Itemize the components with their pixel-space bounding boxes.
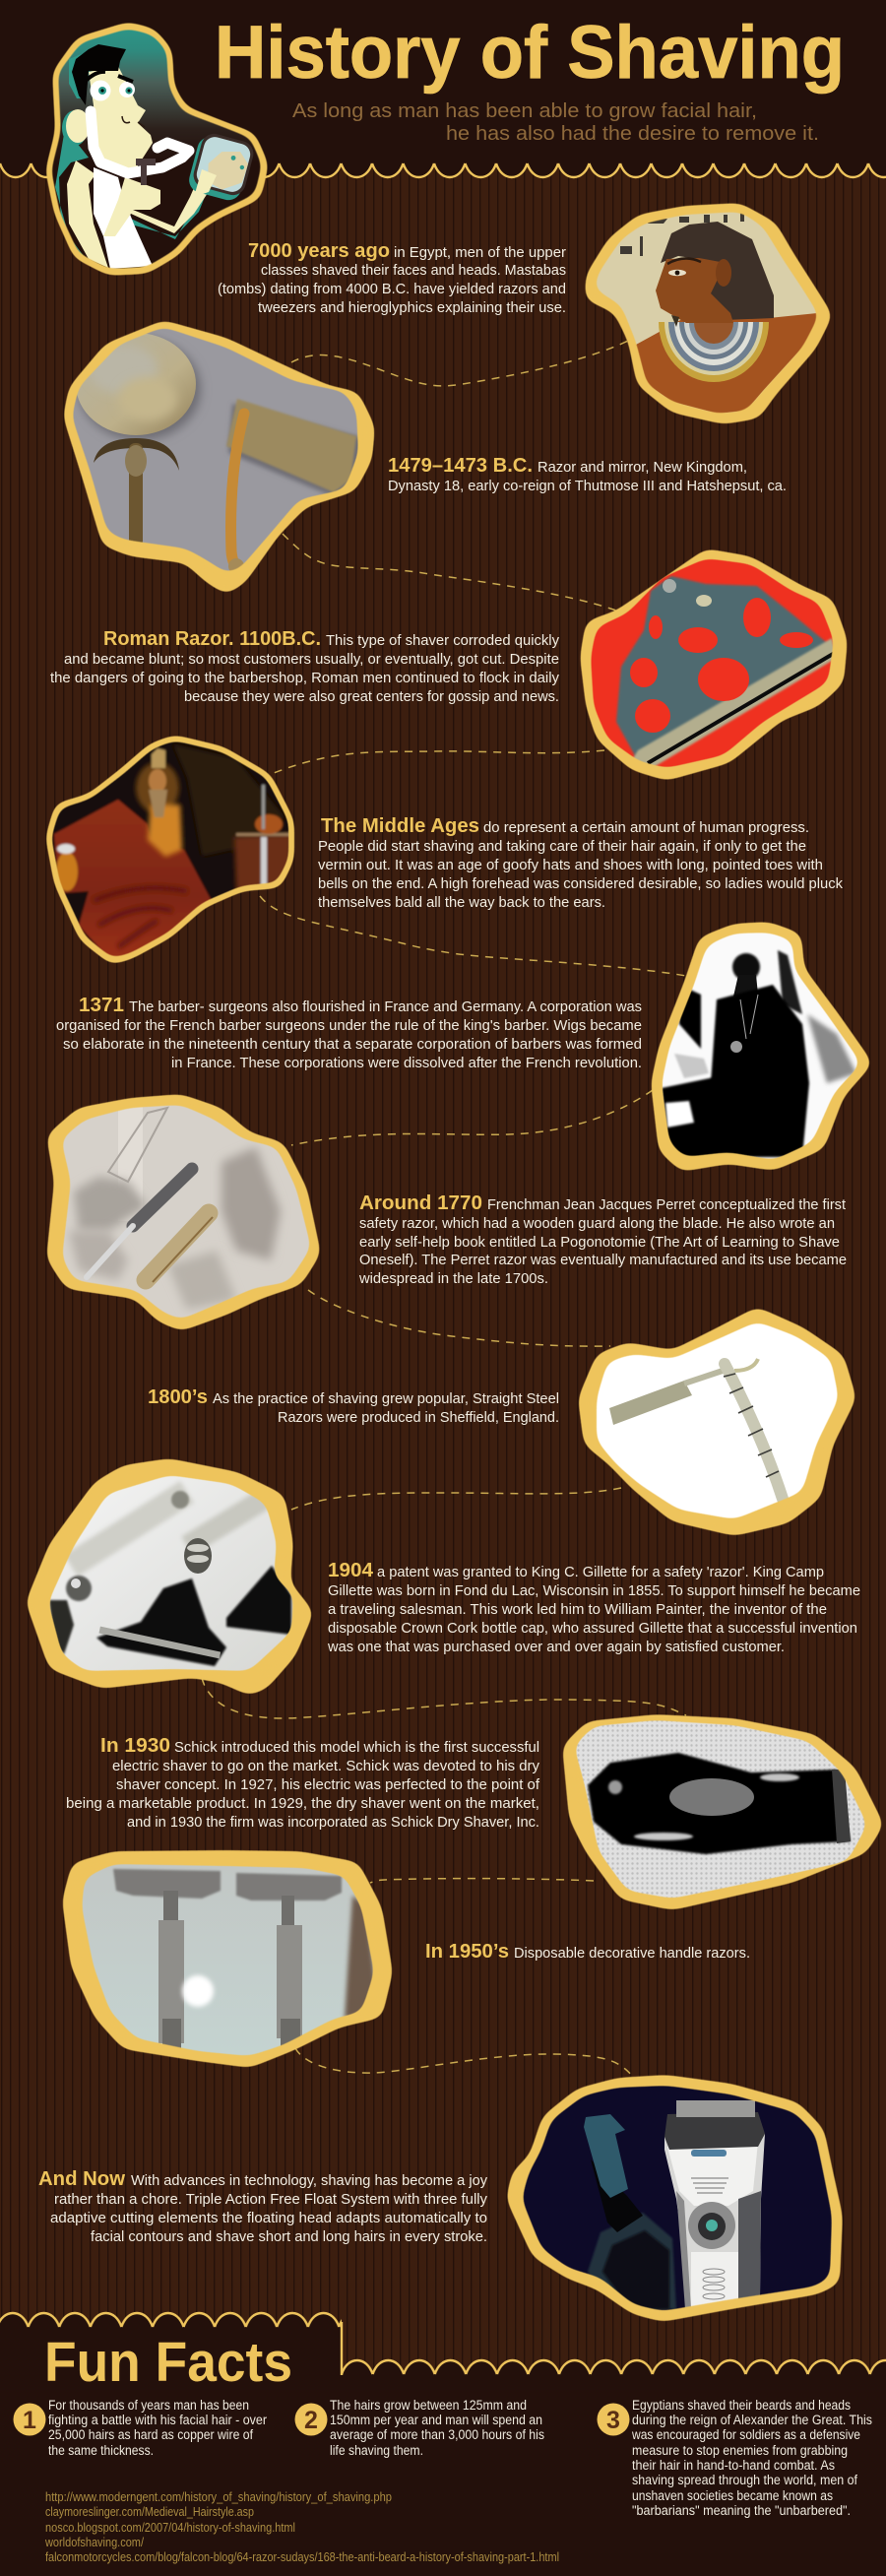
text block: 1904: Gillette was born in Fond du Lac, Wisconsin in 1855. To support himself he became: [328, 1583, 860, 1599]
fun fact 3: [597, 2398, 872, 2518]
source links: claymoreslinger.com/Medieval_Hairstyle.asp: [45, 2505, 254, 2519]
fact 3 text: "barbarians" meaning the "unbarbered".: [632, 2503, 851, 2518]
text block: In 1930: being a marketable product. In 1929, the dry shaver went on the market,: [66, 1796, 539, 1812]
text block: In 1930: [66, 1735, 540, 1831]
panel: Middle Ages king painting: [45, 736, 295, 963]
text block: And Now: rather than a chore. Triple Action Free Float System with three fully: [54, 2192, 488, 2208]
fact 3 text: their hair in hand-to-hand combat. As: [632, 2458, 835, 2473]
dashed connector lines: [202, 340, 686, 2080]
text block: In 1950's: Disposable decorative handle razors.: [514, 1946, 750, 1962]
text block: 1800's: Razors were produced in Sheffield, England.: [278, 1410, 559, 1426]
panel: modern electric shaver: [502, 2073, 847, 2324]
text block: 7000 years ago: tweezers and hieroglyphics explaining their use.: [258, 300, 566, 316]
text block: 1479-1473 B.C.: 1479–1473 B.C.: [388, 455, 533, 477]
source links: [44, 2490, 559, 2564]
header band: [0, 0, 886, 160]
source links: http://www.moderngent.com/history_of_shaving/history_of_shaving.php: [45, 2490, 392, 2504]
panel: Gillette safety razors: [26, 1458, 314, 1696]
subtitle: As long as man has been able to grow facial hair,: [292, 100, 757, 122]
title: History of Shaving: [215, 11, 845, 95]
fact 2 text: average of more than 3,000 hours of his: [330, 2427, 544, 2442]
text block: Around 1770: widespread in the late 1700s.: [358, 1271, 548, 1287]
text block: 7000 years ago: 7000 years ago: [248, 240, 390, 262]
fact 2 text: life shaving them.: [330, 2443, 423, 2458]
text block: 1479-1473 B.C.: [388, 455, 787, 494]
fact 3 text: [631, 2398, 872, 2518]
footer panel background: [0, 2310, 886, 2576]
text block: 1904: 1904: [328, 1560, 374, 1581]
fact 1 text: the same thickness.: [48, 2443, 154, 2458]
text block: Roman Razor: Roman Razor. 1100B.C.: [103, 628, 321, 650]
text block: And Now: And Now: [38, 2168, 125, 2190]
text block: The Middle Ages: bells on the end. A high forehead was considered desirable, so ladies would pluck: [318, 876, 844, 892]
text block: 1479-1473 B.C.: Razor and mirror, New Kingdom,: [538, 460, 747, 476]
text block: In 1950's: In 1950’s: [425, 1941, 509, 1963]
text block: In 1930: and in 1930 the firm was incorporated as Schick Dry Shaver, Inc.: [127, 1815, 539, 1831]
text block: The Middle Ages: People did start shaving and taking care of their hair again, if only to get the: [318, 839, 806, 855]
text block: Roman Razor: because they were also great centers for gossip and news.: [184, 689, 559, 705]
text block: The Middle Ages: do represent a certain amount of human progress.: [483, 820, 809, 836]
text block: 1371: in France. These corporations were dissolved after the French revolution.: [171, 1056, 642, 1071]
fact 1 text: For thousands of years man has been: [48, 2398, 249, 2413]
fun fact 2: [295, 2398, 544, 2458]
text block: 1904: a traveling salesman. This work led him to William Painter, the inventor of the: [328, 1602, 827, 1618]
icon: number 3 badge: 3: [606, 2407, 620, 2434]
fact 3 text: unshaven societies became known as: [632, 2488, 833, 2503]
text block: In 1950's: [425, 1941, 750, 1963]
text block: 1371: [56, 995, 642, 1071]
text block: 7000 years ago: [218, 240, 566, 316]
fact 3 text: during the reign of Alexander the Great. This: [632, 2413, 872, 2427]
panel: bronze mirror and razor: [59, 315, 375, 596]
text block: 1371: so elaborate in the nineteenth century that a separate corporation of barbers was formed: [63, 1037, 642, 1053]
text block: 7000 years ago: in Egypt, men of the upper: [394, 245, 566, 261]
source links: worldofshaving.com/: [44, 2536, 144, 2549]
fact 1 text: fighting a battle with his facial hair - over: [48, 2413, 267, 2427]
panel: razor and sketch: [44, 1093, 325, 1334]
text block: The Middle Ages: vermin out. It was an age of goofy hats and shoes with long, pointed toes with: [318, 858, 823, 873]
text block: 1371: organised for the French barber surgeons under the rule of the king's barber. Wigs became: [56, 1018, 642, 1034]
header scalloped edge: [0, 158, 886, 181]
text block: Roman Razor: [50, 628, 560, 705]
text block: Around 1770: Oneself). The Perret razor was eventually manufactured and its use became: [359, 1253, 847, 1268]
panel: Roman razor: [580, 547, 852, 783]
text block: And Now: With advances in technology, shaving has become a joy: [131, 2173, 488, 2189]
fact 3 text: was encouraged for soldiers as a defensive: [631, 2427, 860, 2442]
text block: Roman Razor: and became blunt; so most customers usually, or eventually, got cut. Despite: [64, 652, 559, 668]
source links: nosco.blogspot.com/2007/04/history-of-shaving.html: [45, 2521, 295, 2535]
text block: Around 1770: Around 1770: [359, 1192, 482, 1214]
fact 2 text: The hairs grow between 125mm and: [330, 2398, 527, 2413]
subtitle: he has also had the desire to remove it.: [446, 123, 819, 145]
icon: number 1 badge: 1: [23, 2407, 36, 2434]
icon: number 2 badge: [295, 2403, 327, 2436]
text block: In 1930: electric shaver to go on the market. Schick was devoted to his dry: [112, 1759, 540, 1774]
fact 3 text: measure to stop enemies from grabbing: [632, 2443, 848, 2458]
panel: two disposable handle razors: [59, 1850, 394, 2068]
fact 1 text: 25,000 hairs as hard as copper wire of: [48, 2427, 253, 2442]
text block: 1371: 1371: [79, 995, 124, 1016]
panel: Egyptian portrait: [581, 202, 837, 424]
text block: 1800's: [148, 1386, 559, 1426]
text block: Roman Razor: This type of shaver corroded quickly: [326, 633, 560, 649]
subtitle: [292, 100, 819, 145]
text block: 7000 years ago: classes shaved their faces and heads. Mastabas: [261, 263, 566, 279]
fact 2 text: [330, 2398, 544, 2458]
icon: hand mirror: [189, 134, 254, 201]
fact 3 text: Egyptians shaved their beards and heads: [632, 2398, 851, 2413]
text block: Around 1770: [358, 1192, 847, 1287]
text block: 1904: [327, 1560, 860, 1655]
text block: In 1930: shaver concept. In 1927, his electric was perfected to the point of: [116, 1777, 540, 1793]
text block: 1800's: 1800’s: [148, 1386, 208, 1408]
icon: number 2 badge: 2: [304, 2407, 318, 2434]
text block: 1800's: As the practice of shaving grew popular, Straight Steel: [213, 1391, 559, 1407]
text block: 1904: a patent was granted to King C. Gillette for a safety 'razor'. King Camp: [377, 1565, 824, 1580]
text block: And Now: facial contours and shave short and long hairs in every stroke.: [91, 2229, 487, 2245]
fact 3 text: shaving spread through the world, men of: [632, 2473, 857, 2487]
text block: 1479-1473 B.C.: Dynasty 18, early co-reign of Thutmose III and Hatshepsut, ca.: [388, 479, 787, 494]
panel: Schick electric shaver: [561, 1713, 886, 1910]
text block: In 1930: Schick introduced this model which is the first successful: [174, 1740, 539, 1756]
text block: The Middle Ages: [318, 815, 844, 911]
fact 2 text: 150mm per year and man will spend an: [330, 2413, 542, 2427]
icon: number 3 badge: [597, 2403, 630, 2436]
source links: falconmotorcycles.com/blog/falcon-blog/64-razor-sudays/168-the-anti-beard-a-history-of-shaving-part-1.html: [45, 2550, 559, 2564]
fact 1 text: [48, 2398, 267, 2458]
text block: 7000 years ago: (tombs) dating from 4000 B.C. have yielded razors and: [218, 282, 566, 297]
text block: The Middle Ages: themselves bald all the way back to the ears.: [318, 895, 605, 911]
text block: And Now: [38, 2168, 488, 2245]
panel: straight steel razor: [576, 1305, 856, 1536]
text block: The Middle Ages: The Middle Ages: [321, 815, 479, 837]
text block: Roman Razor: the dangers of going to the barbershop, Roman men continued to flock in daily: [50, 671, 560, 686]
text block: Around 1770: Frenchman Jean Jacques Perret conceptualized the first: [487, 1197, 846, 1213]
text block: 1371: The barber- surgeons also flourished in France and Germany. A corporation was: [129, 999, 642, 1015]
text block: 1904: was one that was purchased over and over again by satisfied customer.: [327, 1640, 785, 1655]
text block: And Now: adaptive cutting elements the floating head adapts automatically to: [50, 2211, 487, 2226]
text block: Around 1770: early self-help book entitled La Pogonotomie (The Art of Learning to Shave: [359, 1235, 840, 1251]
text block: 1904: disposable Crown Cork bottle cap, who assured Gillette that a successful invention: [328, 1621, 857, 1637]
icon: number 1 badge: [14, 2403, 45, 2436]
heading: Fun Facts: Fun Facts: [44, 2331, 292, 2394]
text block: In 1930: In 1930: [100, 1735, 170, 1757]
text block: Around 1770: safety razor, which had a wooden guard along the blade. He also wrote an: [359, 1216, 835, 1232]
panel: black and white barber photo: [650, 921, 876, 1172]
fun fact 1: [14, 2398, 267, 2458]
panel: cartoon man shaving: [39, 20, 276, 281]
